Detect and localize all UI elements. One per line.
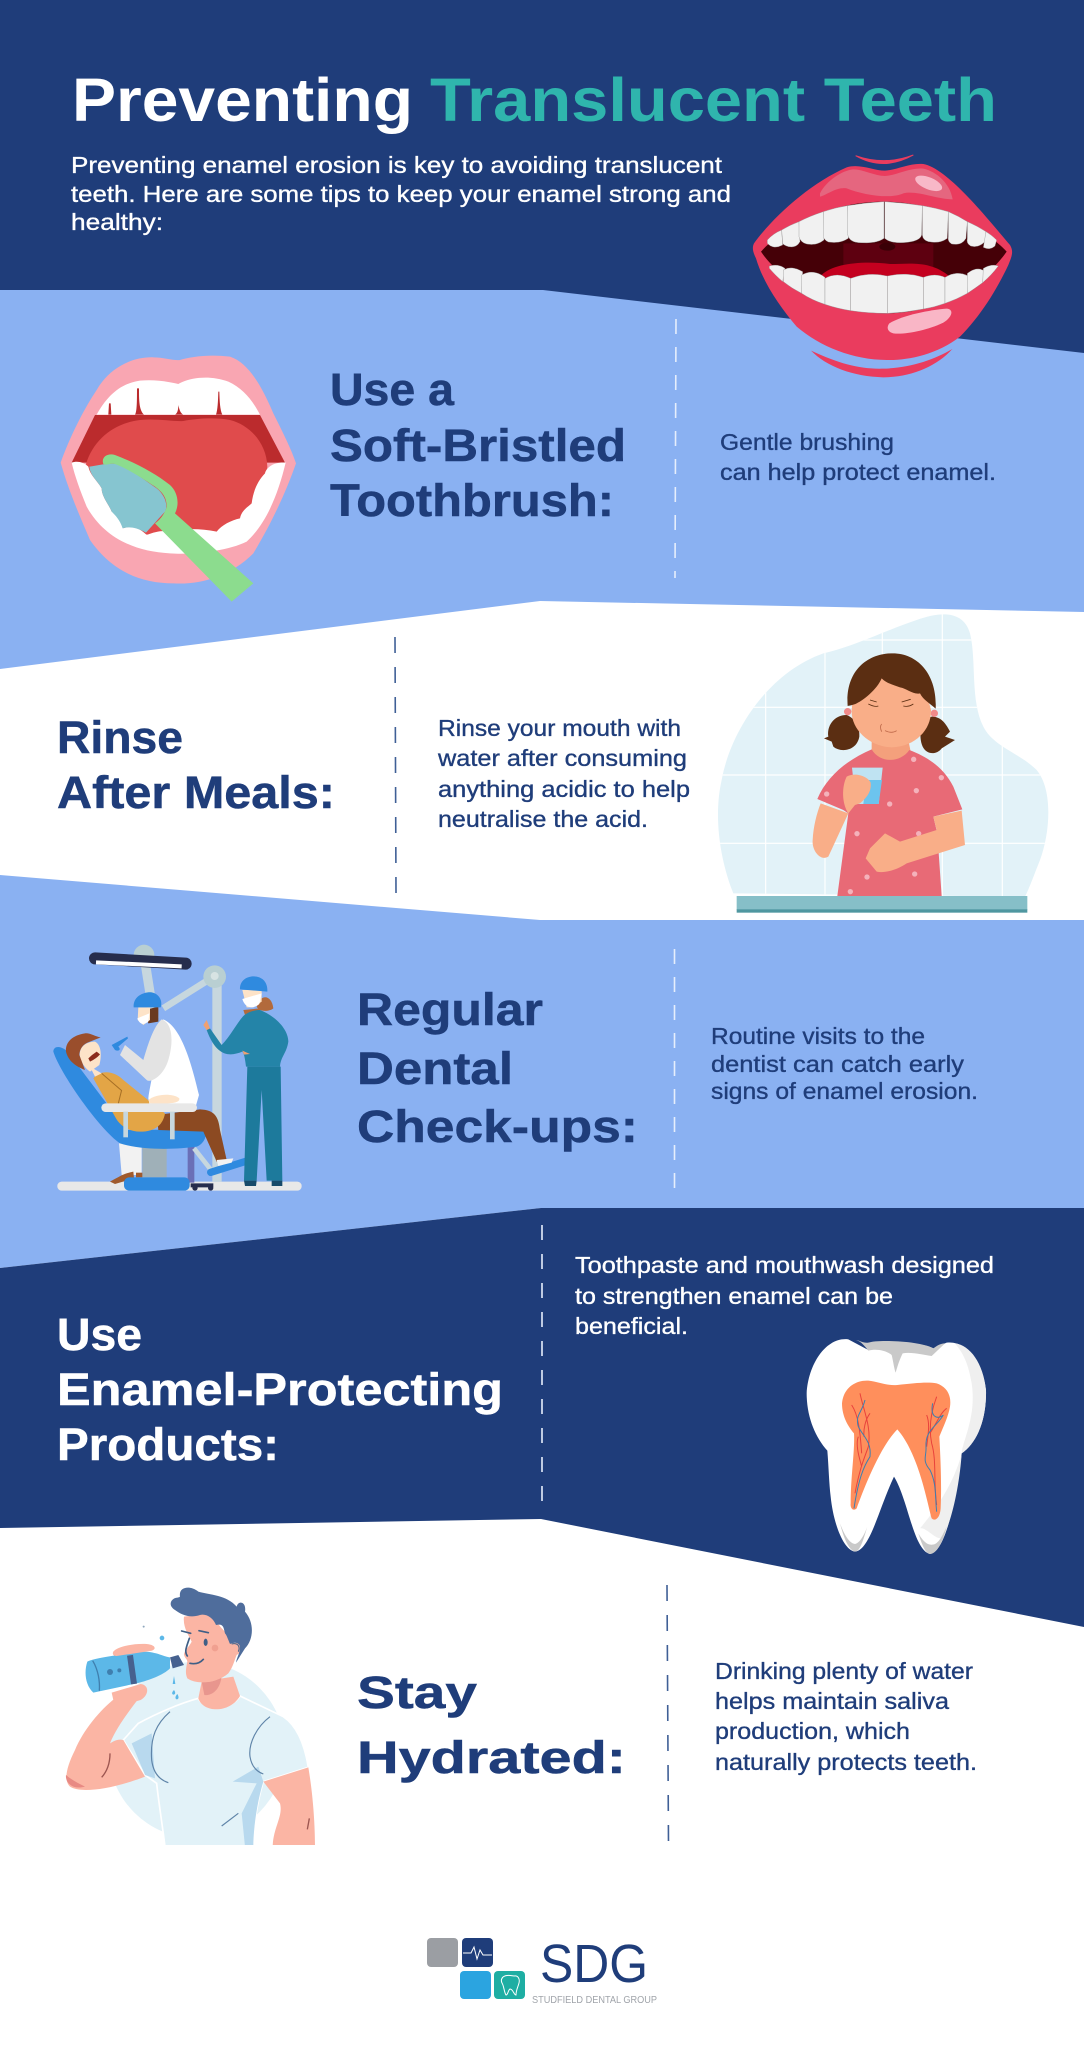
title [72, 66, 997, 134]
text: routine visits: dentist can catch early [711, 1051, 965, 1077]
heading: use a soft-bristled toothbrush: Soft-Bristled [330, 420, 626, 471]
text: rinse your mouth: neutralise the acid. [438, 806, 648, 832]
text: gentle brushing [720, 429, 996, 485]
logo: studfield dental group: STUDFIELD DENTAL GROUP [532, 1994, 657, 2006]
text: toothpaste and mouthwash: to strengthen enamel can be [575, 1283, 893, 1309]
icon: man drinking from water bottle [66, 1588, 315, 1847]
icon: dentist and assistant with patient [53, 945, 302, 1191]
heading: stay hydrated: Stay [357, 1667, 477, 1718]
text: drinking plenty of water: helps maintain saliva [715, 1688, 949, 1714]
text: routine visits: Routine visits to the [711, 1023, 925, 1049]
heading: use enamel-protecting products: Enamel-Protecting [57, 1364, 503, 1415]
intro text: healthy: [71, 209, 163, 235]
intro text: teeth. Here are some tips to keep your enamel strong and [71, 181, 731, 207]
panel: soft-bristled toothbrush band [0, 290, 1084, 680]
heading: use enamel-protecting products: Products: [57, 1419, 279, 1470]
heading: rinse after meals [57, 712, 335, 818]
text: toothpaste and mouthwash: beneficial. [575, 1313, 688, 1339]
heading: use a soft-bristled toothbrush [330, 364, 626, 526]
icon: girl rinsing with glass of water [718, 614, 1048, 913]
panel: dental check-ups band [0, 875, 1084, 1268]
text: routine visits [711, 1023, 978, 1104]
text: rinse your mouth: anything acidic to help [438, 776, 690, 802]
text: drinking plenty of water [715, 1658, 977, 1775]
heading: regular dental check-ups [357, 984, 638, 1152]
text: routine visits: signs of enamel erosion. [711, 1078, 978, 1104]
heading: stay hydrated: Hydrated: [357, 1732, 626, 1783]
title: Translucent Teeth [430, 66, 997, 134]
intro text: Preventing enamel erosion is key to avoiding translucent [71, 152, 723, 178]
icon: red lips with teeth [753, 155, 1012, 377]
heading: regular dental check-ups: Regular [357, 984, 543, 1035]
text: drinking plenty of water: Drinking plenty of water [715, 1658, 973, 1684]
logo: studfield dental group: SDG [540, 1934, 648, 1994]
text: toothpaste and mouthwash [575, 1252, 994, 1339]
text: gentle brushing: can help protect enamel. [720, 459, 996, 485]
icon: open mouth with toothbrush [61, 356, 296, 602]
text: rinse your mouth: Rinse your mouth with [438, 715, 681, 741]
panel: enamel-protecting products band [0, 1208, 1084, 1627]
text: gentle brushing: Gentle brushing [720, 429, 894, 455]
heading: regular dental check-ups: Dental [357, 1043, 513, 1094]
text: drinking plenty of water: naturally protects teeth. [715, 1749, 977, 1775]
icon: tooth cross-section [807, 1339, 986, 1554]
text: drinking plenty of water: production, which [715, 1718, 910, 1744]
logo: studfield dental group [427, 1934, 657, 2006]
heading: regular dental check-ups: Check-ups: [357, 1101, 638, 1152]
panel: rinse after meals band [0, 601, 1084, 920]
heading: use enamel-protecting products: Use [57, 1309, 142, 1360]
panel: header band [0, 0, 1084, 360]
heading: stay hydrated [357, 1667, 626, 1783]
text: toothpaste and mouthwash: Toothpaste and mouthwash designed [575, 1252, 994, 1278]
heading: use a soft-bristled toothbrush: Toothbrush: [330, 475, 614, 526]
heading: rinse after meals: Rinse [57, 712, 183, 763]
heading: use enamel-protecting products [57, 1309, 503, 1470]
intro text [71, 152, 731, 235]
text: rinse your mouth [437, 715, 690, 832]
heading: use a soft-bristled toothbrush: Use a [330, 364, 455, 415]
text: rinse your mouth: water after consuming [437, 745, 687, 771]
title: Preventing [72, 66, 413, 134]
heading: rinse after meals: After Meals: [57, 767, 335, 818]
